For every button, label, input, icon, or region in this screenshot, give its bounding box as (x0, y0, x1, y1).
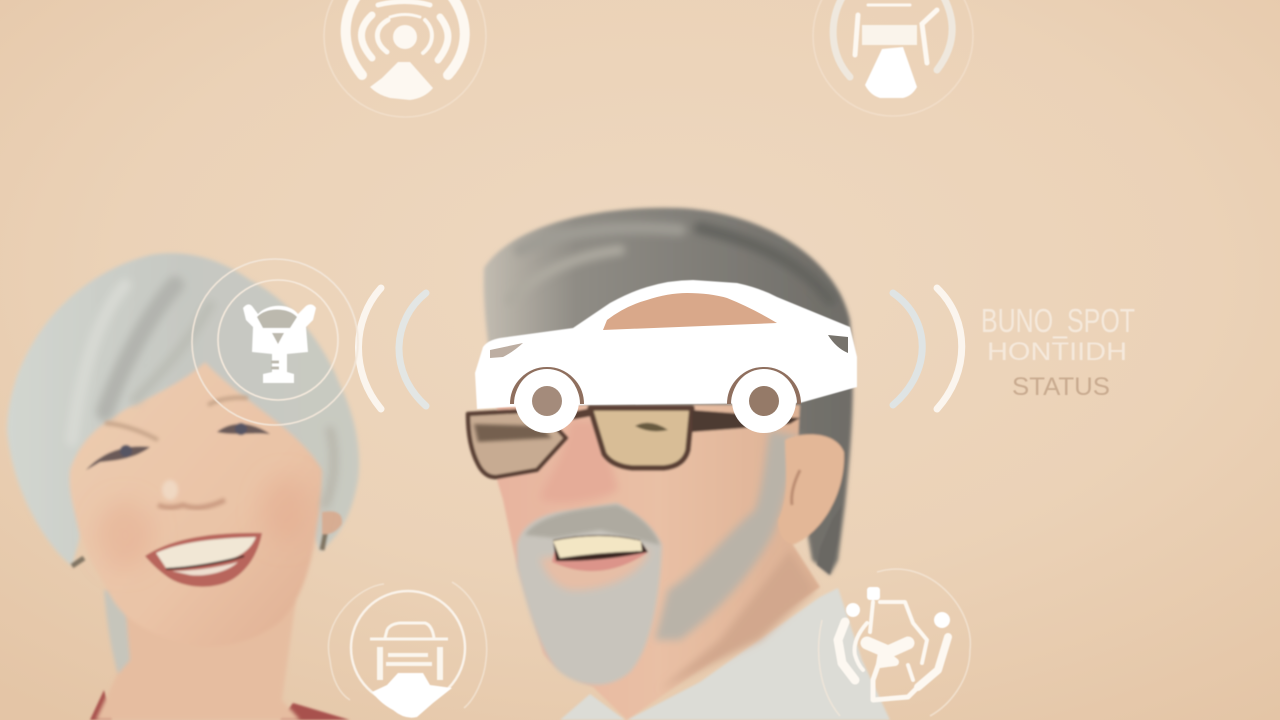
man hair behind ear (817, 505, 842, 575)
man neck shade (660, 550, 815, 690)
car headlight (490, 343, 523, 358)
woman brows (105, 398, 248, 440)
woman cheeks (97, 476, 309, 569)
icon: car rear sensor top right (813, 0, 973, 116)
woman nose (158, 480, 225, 508)
woman neck (96, 600, 300, 720)
wheel: rear (729, 369, 799, 433)
man moustache (525, 505, 660, 545)
woman hair tips (72, 530, 326, 566)
wheel: front (512, 369, 582, 433)
man nose (540, 420, 618, 503)
woman hair strands (72, 285, 334, 505)
man ear (778, 434, 844, 544)
woman face (70, 362, 322, 647)
man hair streaks (510, 228, 830, 300)
woman ear (322, 511, 342, 534)
glasses (468, 408, 800, 477)
car body (475, 280, 857, 409)
car graphic (475, 280, 857, 433)
signal waves: left (358, 288, 426, 409)
man sideburn (655, 430, 802, 640)
icon: car front bottom left (328, 582, 487, 718)
man forehead (590, 301, 790, 345)
icon: radar signal top left (324, 0, 486, 117)
woman eyes (86, 423, 270, 470)
car taillight (828, 335, 848, 353)
man chin patch (540, 550, 650, 590)
man face (497, 405, 820, 720)
photo: senior woman (7, 253, 359, 720)
icon: seat sensor left (192, 259, 358, 425)
man mouth (552, 535, 648, 571)
text: blind-spot label: HONTIIDH (987, 338, 1127, 366)
text: blind-spot label: STATUS (1012, 373, 1110, 401)
man hair (484, 208, 853, 575)
text: blind-spot label (981, 302, 1135, 401)
woman top (90, 690, 350, 720)
photo: senior man (468, 208, 890, 720)
signal waves: right (893, 288, 962, 409)
woman neck hair (104, 590, 130, 674)
woman mouth (145, 533, 262, 587)
man shirt (560, 588, 890, 720)
icon: seat with sensors bottom right (819, 569, 970, 716)
man goatee (517, 503, 662, 685)
woman hair (7, 253, 359, 566)
text: blind-spot label: BUNO_SPOT (981, 302, 1135, 339)
car side window (603, 293, 777, 330)
